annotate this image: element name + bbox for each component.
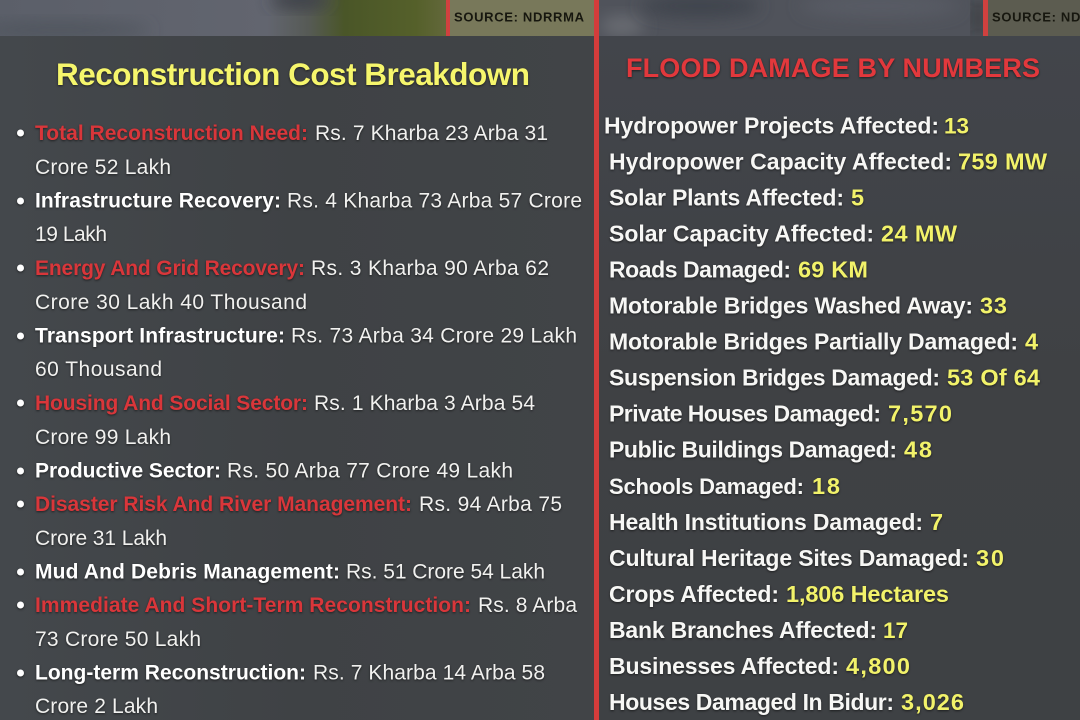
- item: mud and debris management: Rs. 51 Crore 54 Lakh: [346, 560, 545, 584]
- stat: cultural heritage: Cultural Heritage Sites Damaged:: [609, 545, 969, 571]
- stat: businesses: 4,800: [846, 653, 910, 679]
- stat: public buildings: 48: [904, 436, 932, 462]
- item: long-term reconstruction: Crore 2 Lakh: [35, 695, 158, 718]
- item: infrastructure recovery: 19 Lakh: [35, 223, 107, 246]
- item: long-term reconstruction: [17, 662, 545, 718]
- item: immediate and short-term reconstruction: [17, 594, 577, 651]
- left photo strip: [0, 0, 594, 38]
- item: mud and debris management: [17, 560, 545, 584]
- stat: bank branches: 17: [883, 618, 908, 643]
- item: total reconstruction need: [17, 122, 548, 179]
- central red divider: [594, 0, 599, 720]
- source tag left: [446, 0, 585, 36]
- damage statistics list: [604, 112, 1048, 715]
- item: energy and grid recovery: [17, 257, 549, 314]
- item: immediate and short-term reconstruction: Immediate And Short-Term Reconstruction:: [35, 594, 471, 617]
- item: transport infrastructure: 60 Thousand: [35, 358, 162, 381]
- item: housing and social sector: Crore 99 Lakh: [35, 426, 171, 449]
- item: transport infrastructure: Rs. 73 Arba 34 Crore 29 Lakh: [291, 324, 577, 348]
- item: long-term reconstruction: Long-term Reconstruction:: [35, 662, 306, 684]
- item: housing and social sector: [17, 392, 535, 449]
- item: disaster risk and river management: Crore 31 Lakh: [35, 527, 167, 550]
- item: disaster risk and river management: [17, 493, 562, 550]
- item: energy and grid recovery: Crore 30 Lakh 40 Thousand: [35, 291, 307, 314]
- item: transport infrastructure: Transport Infrastructure:: [35, 324, 285, 348]
- item: infrastructure recovery: Infrastructure Recovery:: [35, 190, 281, 212]
- stat: bridges washed away: Motorable Bridges Washed Away:: [609, 292, 973, 318]
- stat: hydropower projects: Hydropower Projects Affected:: [604, 112, 939, 138]
- item: productive sector: Productive Sector:: [35, 460, 221, 482]
- stat: private houses: 7,570: [888, 400, 952, 426]
- right panel background: [599, 36, 1080, 720]
- stat: hydropower capacity: Hydropower Capacity Affected:: [609, 148, 952, 174]
- stat: solar plants: Solar Plants Affected:: [609, 184, 844, 210]
- item: transport infrastructure: [17, 324, 577, 381]
- item: housing and social sector: Rs. 1 Kharba 3 Arba 54: [314, 392, 535, 415]
- stat: houses in bidur: Houses Damaged In Bidur:: [609, 689, 894, 715]
- stat: houses in bidur: 3,026: [901, 689, 964, 715]
- stat: roads: Roads Damaged:: [609, 256, 791, 282]
- stat: schools: Schools Damaged:: [609, 474, 804, 499]
- stat: cultural heritage: 30: [976, 545, 1004, 571]
- source tag left: SOURCE: NDRRMA: [454, 10, 585, 24]
- item: productive sector: Rs. 50 Arba 77 Crore 49 Lakh: [227, 460, 513, 482]
- stat: businesses: Businesses Affected:: [609, 653, 839, 679]
- panel: flood damage by numbers: [599, 0, 1080, 720]
- item: productive sector: [17, 460, 513, 482]
- stat: health institutions: 7: [930, 509, 943, 535]
- item: infrastructure recovery: [17, 190, 582, 246]
- stat: bridges washed away: 33: [980, 292, 1007, 318]
- right photo strip: [599, 0, 1080, 36]
- heading: reconstruction cost breakdown: Reconstruction Cost Breakdown: [56, 56, 530, 92]
- stat: hydropower capacity: 759 MW: [958, 148, 1048, 174]
- cost list: [17, 122, 582, 718]
- item: housing and social sector: Housing And Social Sector:: [35, 392, 308, 415]
- item: mud and debris management: Mud And Debris Management:: [35, 560, 340, 584]
- item: disaster risk and river management: Rs. 94 Arba 75: [419, 493, 562, 516]
- stat: crops: Crops Affected:: [609, 581, 779, 607]
- stat: solar capacity: 24 MW: [881, 220, 958, 246]
- stat: crops: 1,806 Hectares: [786, 581, 949, 607]
- stat: schools: 18: [812, 473, 840, 499]
- stat: bridges partially damaged: Motorable Bridges Partially Damaged:: [609, 328, 1018, 354]
- item: total reconstruction need: Crore 52 Lakh: [35, 156, 171, 179]
- source tag right: [983, 0, 1080, 36]
- item: disaster risk and river management: Disaster Risk And River Management:: [35, 493, 412, 516]
- item: energy and grid recovery: Rs. 3 Kharba 90 Arba 62: [311, 257, 549, 280]
- left panel background: [0, 36, 594, 720]
- stat: roads: 69 KM: [798, 256, 868, 282]
- panel: reconstruction cost breakdown: [0, 0, 594, 720]
- item: long-term reconstruction: Rs. 7 Kharba 14 Arba 58: [313, 662, 545, 684]
- item: infrastructure recovery: Rs. 4 Kharba 73 Arba 57 Crore: [287, 190, 582, 212]
- stat: solar plants: 5: [851, 184, 864, 210]
- stat: bank branches: Bank Branches Affected:: [609, 617, 877, 643]
- heading: flood damage by numbers: FLOOD DAMAGE BY NUMBERS: [626, 53, 1040, 83]
- item: immediate and short-term reconstruction: Rs. 8 Arba: [478, 594, 577, 617]
- stat: solar capacity: Solar Capacity Affected:: [609, 220, 874, 246]
- item: total reconstruction need: Rs. 7 Kharba 23 Arba 31: [315, 122, 548, 145]
- stat: suspension bridges: Suspension Bridges Damaged:: [609, 364, 940, 390]
- stat: health institutions: Health Institutions Damaged:: [609, 509, 923, 535]
- stat: hydropower projects: 13: [944, 114, 969, 138]
- item: immediate and short-term reconstruction: 73 Crore 50 Lakh: [35, 628, 201, 651]
- stat: public buildings: Public Buildings Damaged:: [609, 436, 897, 462]
- stat: suspension bridges: 53 Of 64: [947, 364, 1040, 390]
- stat: private houses: Private Houses Damaged:: [609, 400, 881, 426]
- item: energy and grid recovery: Energy And Grid Recovery:: [35, 257, 305, 280]
- item: total reconstruction need: Total Reconstruction Need:: [35, 122, 308, 145]
- stat: bridges partially damaged: 4: [1025, 328, 1038, 354]
